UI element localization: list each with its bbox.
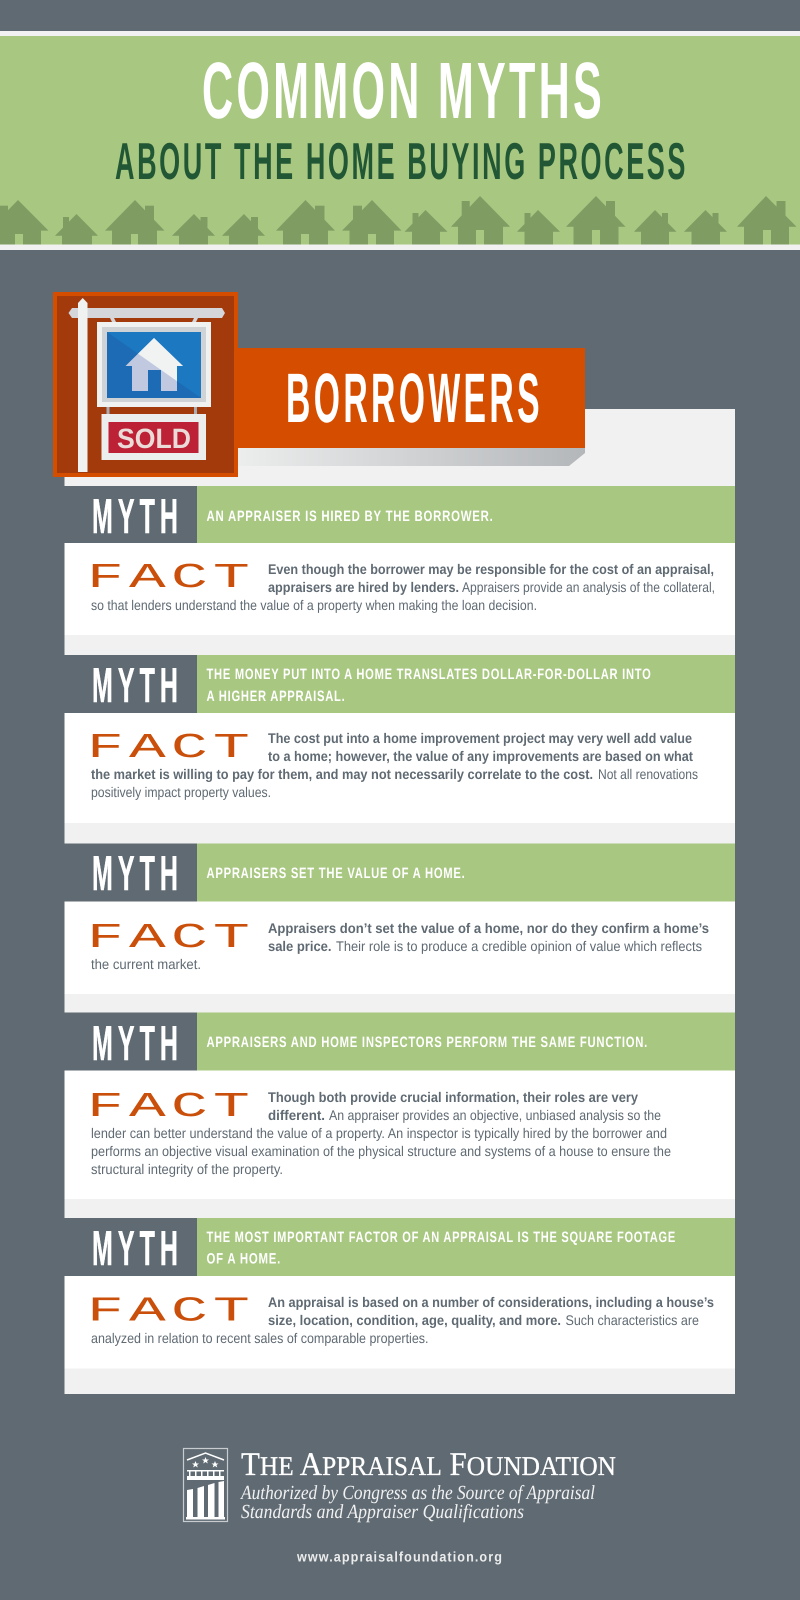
panel: myth and fact 4 bbox=[64, 1012, 735, 1199]
panel: myth and fact 4: APPRAISERS AND HOME INSPECTORS PERFORM THE SAME FUNCTION. bbox=[206, 1034, 648, 1051]
panel: myth and fact 4: different. bbox=[268, 1107, 325, 1123]
fact card bbox=[64, 1276, 735, 1368]
panel: myth and fact 2: MYTH bbox=[92, 659, 183, 713]
icon: foundation building bbox=[184, 1448, 228, 1522]
panel: myth and fact 3: sale price. bbox=[268, 938, 332, 954]
panel: myth and fact 1: FACT bbox=[87, 558, 255, 598]
panel: myth and fact 2: A HIGHER APPRAISAL. bbox=[206, 688, 346, 705]
panel: myth and fact 4: structural integrity of the property. bbox=[91, 1161, 283, 1177]
panel: myth and fact 1: so that lenders understand the value of a property when making the loan decision. bbox=[91, 597, 537, 613]
organisation name: THE APPRAISAL FOUNDATION bbox=[241, 1447, 616, 1483]
panel: myth and fact 5: Such characteristics are bbox=[566, 1312, 699, 1328]
panel: myth and fact 2: to a home; however, the value of any improvements are based on what bbox=[268, 748, 693, 764]
panel: myth and fact 4: FACT bbox=[87, 1087, 255, 1127]
panel: myth and fact 4: Though both provide crucial information, their roles are very bbox=[268, 1089, 638, 1105]
main content panel bbox=[64, 409, 735, 1394]
panel: myth and fact 1: Even though the borrower may be responsible for the cost of an appraisal, bbox=[268, 561, 714, 577]
panel: myth and fact 2: FACT bbox=[87, 728, 255, 768]
panel: myth and fact 4: An appraiser provides an objective, unbiased analysis so the bbox=[329, 1107, 661, 1123]
panel: myth and fact 3: MYTH bbox=[92, 847, 183, 901]
panel: myth and fact 4: performs an objective visual examination of the physical structure and systems of a house to ensure the bbox=[91, 1143, 671, 1159]
myth statement band bbox=[197, 655, 735, 713]
panel: myth and fact 3: FACT bbox=[87, 918, 255, 958]
fact card bbox=[64, 713, 735, 823]
panel: myth and fact 1: AN APPRAISER IS HIRED BY THE BORROWER. bbox=[206, 508, 494, 525]
panel: myth and fact 4: lender can better understand the value of a property. An inspector is typically hired by the borrower and bbox=[91, 1125, 667, 1141]
myth statement band bbox=[197, 1218, 735, 1276]
panel: myth and fact 5: analyzed in relation to recent sales of comparable properties. bbox=[91, 1330, 428, 1346]
panel: myth and fact 3: APPRAISERS SET THE VALUE OF A HOME. bbox=[206, 865, 466, 882]
myth label block bbox=[64, 1012, 197, 1070]
panel: myth and fact 5: An appraisal is based on a number of considerations, including a house’s bbox=[268, 1294, 714, 1310]
panel: myth and fact 5: FACT bbox=[87, 1292, 255, 1332]
panel: myth and fact 5 bbox=[64, 1218, 735, 1368]
sold plate bbox=[102, 414, 206, 460]
panel: myth and fact 1: Appraisers provide an analysis of the collateral, bbox=[462, 579, 715, 595]
panel: myth and fact 1: appraisers are hired by lenders. bbox=[268, 579, 459, 595]
website url: www.appraisalfoundation.org bbox=[296, 1548, 503, 1564]
row of house silhouettes bbox=[0, 196, 796, 245]
panel: myth and fact 2: Not all renovations bbox=[598, 766, 698, 782]
panel: myth and fact 5: MYTH bbox=[92, 1222, 183, 1276]
tagline: Authorized by Congress as the Source of Appraisal bbox=[239, 1482, 595, 1504]
myth statement band bbox=[197, 844, 735, 902]
fact card bbox=[64, 543, 735, 635]
panel: myth and fact 3: Appraisers don’t set the value of a home, nor do they confirm a home’s bbox=[268, 920, 709, 936]
ribbon shadow bbox=[238, 448, 585, 466]
fact card bbox=[64, 1070, 735, 1199]
myth label block bbox=[64, 844, 197, 902]
header banner bbox=[0, 31, 800, 250]
panel: myth and fact 3 bbox=[64, 844, 735, 994]
hanging house panel bbox=[97, 322, 211, 407]
panel: myth and fact 2: the market is willing to pay for them, and may not necessarily correlate to the cost. bbox=[91, 766, 593, 782]
panel: myth and fact 2 bbox=[64, 655, 735, 823]
panel: myth and fact 3: the current market. bbox=[91, 956, 201, 972]
panel: myth and fact 4: MYTH bbox=[92, 1017, 183, 1071]
myth label block bbox=[64, 655, 197, 713]
myth statement band bbox=[197, 1012, 735, 1070]
panel: myth and fact 1 bbox=[64, 486, 735, 635]
panel: myth and fact 2: The cost put into a home improvement project may very well add value bbox=[268, 730, 692, 746]
orange heading ribbon bbox=[238, 348, 585, 466]
panel: myth and fact 5: OF A HOME. bbox=[206, 1250, 281, 1268]
icon: sold sign: SOLD bbox=[117, 423, 191, 454]
icon: sold sign bbox=[55, 294, 236, 475]
myth label block bbox=[64, 486, 197, 543]
panel: myth and fact 5: size, location, condition, age, quality, and more. bbox=[268, 1312, 561, 1328]
footer logo: Standards and Appraiser Qualifications bbox=[241, 1501, 524, 1523]
panel: myth and fact 1: MYTH bbox=[92, 490, 183, 544]
fact card bbox=[64, 902, 735, 994]
sign post bbox=[78, 298, 88, 472]
myth label block bbox=[64, 1218, 197, 1276]
myth statement band bbox=[197, 486, 735, 543]
footer logo bbox=[184, 1447, 616, 1523]
panel: myth and fact 2: THE MONEY PUT INTO A HOME TRANSLATES DOLLAR-FOR-DOLLAR INTO bbox=[206, 666, 652, 683]
panel: myth and fact 2: positively impact property values. bbox=[91, 784, 271, 800]
panel: myth and fact 3: Their role is to produce a credible opinion of value which reflects bbox=[336, 938, 702, 954]
